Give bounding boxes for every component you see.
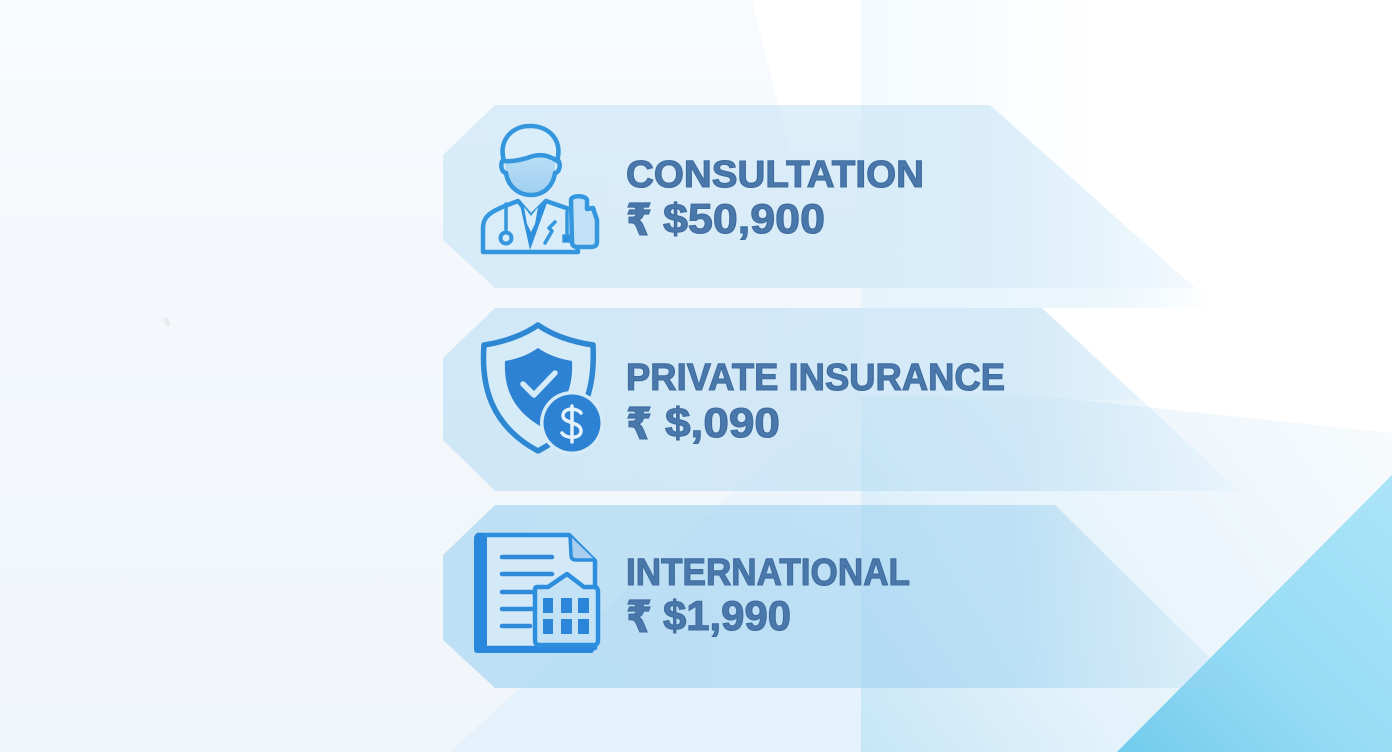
label: private insurance: PRIVATE INSURANCE [626, 357, 1005, 399]
price: private insurance: $,090 [665, 399, 780, 446]
price: consultation: $50,900 [663, 195, 825, 242]
panel shape: private insurance [443, 308, 1240, 491]
rupee sign: private insurance: ₹ [626, 400, 652, 449]
panel: private insurance [443, 308, 1240, 491]
label: international: INTERNATIONAL [626, 552, 910, 594]
panel shape: international [443, 505, 1240, 688]
icon: shield with dollar [483, 325, 604, 455]
panel: international [443, 505, 1240, 688]
icon: doctor [483, 126, 597, 252]
panel shape: consultation [443, 105, 1195, 288]
label: consultation: CONSULTATION [626, 154, 924, 196]
icon: document with building [474, 533, 598, 653]
price: international: $1,990 [663, 592, 791, 639]
rupee sign: consultation: ₹ [626, 196, 652, 245]
rupee sign: international: ₹ [626, 593, 652, 642]
decorative corner triangle [1117, 475, 1392, 752]
panel: consultation [443, 105, 1195, 288]
